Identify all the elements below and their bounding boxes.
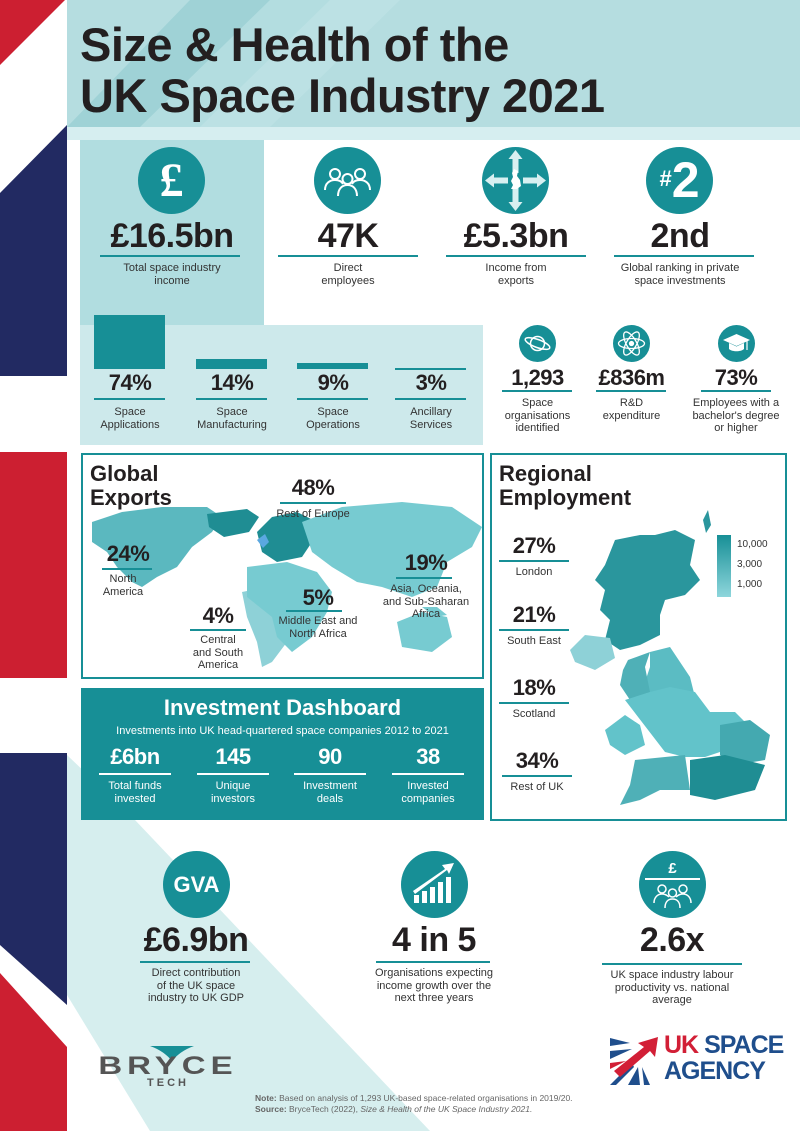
- stat: organisations: identified: [515, 422, 560, 434]
- icon: GVA: [163, 851, 230, 918]
- stat: GVA: of the UK space: [157, 980, 235, 992]
- stat: ranking: Global ranking in private: [621, 262, 739, 274]
- stat: organisations: 1,293: [511, 365, 564, 390]
- bar chart: industry segments: [94, 315, 466, 430]
- stat: investors: [197, 744, 269, 804]
- bar chart: industry segments: Services: [410, 418, 452, 430]
- title: [80, 18, 604, 122]
- bar chart: industry segments: Space: [317, 406, 349, 418]
- stat: deals: deals: [317, 792, 343, 804]
- icon: uk arrows: [482, 147, 549, 214]
- bar chart: industry segments: Space: [216, 406, 248, 418]
- icon: #2: #2: [659, 152, 700, 208]
- bar chart: industry segments: 3%: [416, 370, 446, 395]
- label: 4% central and south america: [190, 603, 246, 671]
- stat: scotland: Scotland: [513, 708, 555, 720]
- stat: productivity: UK space industry labour: [611, 969, 733, 981]
- stat: R&D: [596, 325, 666, 422]
- label: 24% north america: [102, 541, 152, 598]
- icon: planet: [519, 325, 556, 362]
- logo: uk space agency: AGENCY: [664, 1057, 765, 1085]
- icon: graduation cap: [718, 325, 755, 362]
- logo: brycetech: [98, 1046, 238, 1089]
- panel: regional employment: [490, 453, 787, 821]
- title: UK Space Industry 2021: [80, 69, 604, 122]
- bar chart: industry segments: Space: [114, 406, 146, 418]
- stat: investors: 145: [215, 744, 251, 769]
- stat: south east: [499, 602, 569, 647]
- stat: exports: [446, 147, 586, 286]
- stat: organisations: organisations: [505, 410, 570, 422]
- stat: scotland: 18%: [513, 675, 555, 700]
- stat: GVA: Direct contribution: [152, 967, 240, 979]
- stat: ranking: 2nd: [651, 217, 709, 255]
- stat: london: London: [516, 566, 552, 578]
- bar chart: industry segments: 9%: [318, 370, 348, 395]
- stat: productivity: 2.6x: [640, 921, 704, 959]
- logo: brycetech: TECH: [147, 1077, 189, 1089]
- stat: exports: exports: [498, 274, 534, 286]
- stat: degree: bachelor's degree: [692, 410, 780, 422]
- stat: companies: companies: [401, 792, 455, 804]
- stat: organisations: [502, 325, 572, 434]
- stat: income: £16.5bn: [110, 217, 234, 255]
- logo: uk space agency: [610, 1031, 784, 1085]
- stat: productivity: productivity vs. national: [615, 982, 729, 994]
- stat: london: [499, 533, 569, 578]
- label: 24% north america: America: [103, 586, 143, 598]
- label: 19% asia: 19%: [405, 550, 447, 575]
- label: 48% rest of europe: 48%: [292, 475, 334, 500]
- label: 4% central and south america: 4%: [203, 603, 233, 628]
- label: 19% asia: [383, 550, 469, 620]
- note and source: Source: BryceTech (2022), Size & Health of the UK Space Industry 2021.: [255, 1104, 532, 1114]
- label: 48% rest of europe: [276, 475, 350, 520]
- stat: funds: invested: [114, 792, 155, 804]
- note and source: [255, 1093, 573, 1114]
- heading: regional employment: Employment: [499, 485, 631, 510]
- stat: rest of uk: Rest of UK: [510, 781, 564, 793]
- stat: deals: 90: [318, 744, 342, 769]
- stat: deals: Investment: [303, 780, 357, 792]
- label: 5% middle east: 5%: [303, 585, 333, 610]
- stat: investors: investors: [211, 792, 255, 804]
- stat: investors: Unique: [216, 780, 250, 792]
- stat: companies: Invested: [407, 780, 449, 792]
- stat: funds: Total funds: [108, 780, 162, 792]
- stat: south east: South East: [507, 635, 561, 647]
- bar chart: industry segments: 74%: [109, 370, 151, 395]
- stat: deals: [294, 744, 366, 804]
- stat: GVA: £6.9bn: [144, 921, 248, 959]
- stat: employees: 47K: [318, 217, 378, 255]
- heading: global exports: Exports: [90, 485, 172, 510]
- stat: companies: [392, 744, 464, 804]
- stat: income: Total space industry: [123, 262, 221, 274]
- stat: funds: £6bn: [110, 744, 160, 769]
- stat: 4 in 5: Organisations expecting: [375, 967, 493, 979]
- stat: productivity: [602, 851, 742, 1006]
- stat: R&D: £836m: [598, 365, 664, 390]
- legend: 3,000: [737, 559, 762, 570]
- label: 4% central and south america: America: [198, 659, 238, 671]
- label: 19% asia: Africa: [412, 608, 440, 620]
- stat: GVA: industry to UK GDP: [148, 992, 244, 1004]
- label: 5% middle east: North Africa: [289, 628, 347, 640]
- stat: 4 in 5: [375, 851, 493, 1004]
- logo: uk space agency: UK SPACE: [664, 1031, 783, 1059]
- stat: ranking: space investments: [634, 274, 726, 286]
- icon: pound: [138, 147, 205, 214]
- logo: brycetech: BRYCE: [98, 1052, 238, 1079]
- stat: 4 in 5: next three years: [395, 992, 473, 1004]
- title: Size & Health of the: [80, 18, 509, 71]
- legend: 10,000: [737, 539, 768, 550]
- stat: R&D: expenditure: [603, 410, 660, 422]
- stat: R&D: R&D: [620, 397, 643, 409]
- stat: degree: or higher: [714, 422, 758, 434]
- heading: regional employment: [499, 461, 631, 510]
- legend: [717, 535, 768, 597]
- bar chart: industry segments: Manufacturing: [197, 418, 267, 430]
- label: 24% north america: 24%: [107, 541, 149, 566]
- stat: organisations: Space: [522, 397, 553, 409]
- panel: global exports: [81, 453, 484, 679]
- panel: headline stats background: [80, 140, 483, 445]
- icon: people: [314, 147, 381, 214]
- icon: GVA: GVA: [173, 872, 220, 897]
- icon: pound over people: [639, 851, 706, 918]
- stat: degree: [692, 325, 780, 434]
- label: 4% central and south america: and South: [193, 646, 243, 658]
- icon: atom: [613, 325, 650, 362]
- stat: GVA: [140, 851, 250, 1004]
- stat: productivity: average: [652, 994, 692, 1006]
- stat: rest of uk: [502, 748, 572, 793]
- label: 4% central and south america: Central: [200, 634, 236, 646]
- icon: pound over people: £: [668, 860, 677, 877]
- stat: 4 in 5: income growth over the: [377, 980, 491, 992]
- heading: regional employment: Regional: [499, 461, 592, 486]
- stat: companies: 38: [416, 744, 440, 769]
- label: 5% middle east: Middle East and: [279, 615, 357, 627]
- stat: south east: 21%: [513, 602, 555, 627]
- stat: degree: Employees with a: [693, 397, 779, 409]
- panel: investment dashboard: [81, 688, 484, 820]
- label: 24% north america: North: [110, 573, 136, 585]
- label: 48% rest of europe: Rest of Europe: [276, 508, 350, 520]
- stat: degree: 73%: [715, 365, 757, 390]
- stat: rest of uk: 34%: [516, 748, 558, 773]
- stat: employees: [278, 147, 418, 286]
- heading: global exports: [90, 461, 172, 510]
- subtitle: Investments into UK head-quartered space companies 2012 to 2021: [116, 725, 449, 737]
- stat: funds: [99, 744, 171, 804]
- stat: 4 in 5: 4 in 5: [392, 921, 476, 959]
- heading: investment dashboard: Investment Dashboard: [164, 695, 401, 720]
- stat: exports: Income from: [485, 262, 547, 274]
- bar chart: industry segments: Applications: [100, 418, 160, 430]
- world map: [92, 502, 482, 667]
- icon: growth chart: [401, 851, 468, 918]
- stat: exports: £5.3bn: [464, 217, 568, 255]
- stat: london: 27%: [513, 533, 555, 558]
- uk map: [570, 510, 770, 805]
- bar chart: industry segments: Operations: [306, 418, 360, 430]
- bar chart: industry segments: Ancillary: [410, 406, 452, 418]
- label: 19% asia: Asia, Oceania,: [390, 583, 462, 595]
- legend: 1,000: [737, 579, 762, 590]
- heading: global exports: Global: [90, 461, 158, 486]
- stat: scotland: [499, 675, 569, 720]
- note and source: Note: Based on analysis of 1,293 UK-based space-related organisations in 2019/20.: [255, 1093, 573, 1103]
- stat: employees: employees: [321, 274, 375, 286]
- icon: #2: [646, 147, 713, 214]
- stat: employees: Direct: [334, 262, 362, 274]
- stat: ranking: [614, 147, 754, 286]
- stat: income: income: [154, 274, 190, 286]
- icon: pound: £: [160, 154, 184, 207]
- bar chart: industry segments: 14%: [211, 370, 253, 395]
- label: 19% asia: and Sub-Saharan: [383, 596, 469, 608]
- label: 5% middle east: [279, 585, 357, 640]
- stat: income: [100, 147, 240, 286]
